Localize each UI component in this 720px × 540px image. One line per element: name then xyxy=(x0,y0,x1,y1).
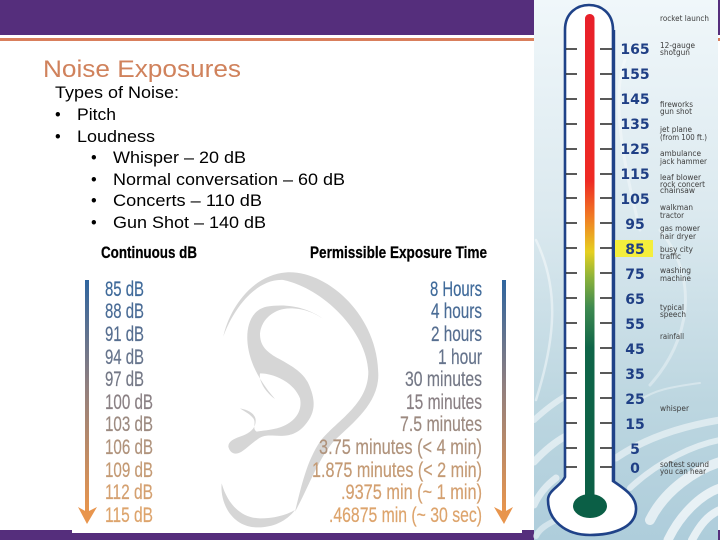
text block: types of noise: • xyxy=(55,128,61,146)
panel: exposure chart xyxy=(72,236,522,533)
sound source labels: gun shot xyxy=(660,107,692,116)
text block: types of noise: Concerts – 110 dB xyxy=(113,192,262,210)
sound source labels: speech xyxy=(660,310,686,319)
sound source labels: fireworks xyxy=(660,100,693,109)
sound source labels: you can hear xyxy=(660,467,707,476)
list: exposure times: 4 hours xyxy=(431,300,482,323)
text block: types of noise xyxy=(55,84,345,232)
sound source labels: walkman xyxy=(660,203,693,212)
scale numbers: 125 xyxy=(620,142,650,158)
sound source labels: (from 100 ft.) xyxy=(660,133,707,142)
sound source labels: traffic xyxy=(660,252,681,261)
sound source labels: leaf blower xyxy=(660,173,702,182)
text block: types of noise: • xyxy=(91,171,97,189)
text block: types of noise: • xyxy=(91,214,97,232)
sound source labels: softest sound xyxy=(660,460,709,469)
text block: types of noise: Normal conversation – 60 dB xyxy=(113,171,345,189)
sound source labels: jack hammer xyxy=(659,157,708,166)
sound source labels: busy city xyxy=(660,245,693,254)
scale numbers: 165 xyxy=(620,42,650,58)
list: exposure times: 2 hours xyxy=(431,323,482,346)
list: decibel levels: 109 dB xyxy=(105,459,153,482)
scale numbers: 35 xyxy=(625,367,645,383)
scale numbers: 155 xyxy=(620,67,650,83)
sound source labels xyxy=(659,14,709,476)
text block: types of noise: Loudness xyxy=(77,128,155,146)
arrow: left xyxy=(78,280,97,524)
sound source labels: rock concert xyxy=(660,180,705,189)
panel: decibel thermometer xyxy=(534,0,720,540)
text block: types of noise: Types of Noise: xyxy=(55,84,179,102)
text block: types of noise: Pitch xyxy=(77,106,116,124)
orange rule xyxy=(0,38,720,41)
sound source labels: chainsaw xyxy=(660,186,695,195)
sound source labels: hair dryer xyxy=(660,232,697,241)
list: decibel levels: 85 dB xyxy=(105,278,144,301)
list: exposure times: 15 minutes xyxy=(406,391,482,414)
swirl background xyxy=(534,60,720,540)
sound source labels: washing xyxy=(660,266,691,275)
sound source labels: whisper xyxy=(660,404,690,413)
footer bar xyxy=(0,530,720,540)
list: decibel levels: 100 dB xyxy=(105,391,153,414)
text block: types of noise: • xyxy=(91,149,97,167)
mercury column xyxy=(573,14,607,518)
sound source labels: jet plane xyxy=(659,125,692,134)
text block: types of noise: • xyxy=(91,192,97,210)
heading: continuous dB: Continuous dB xyxy=(101,243,197,262)
scale numbers: 105 xyxy=(620,192,650,208)
scale numbers: 65 xyxy=(625,292,645,308)
text block: types of noise: • xyxy=(55,106,61,124)
sound source labels: gas mower xyxy=(660,224,701,233)
list: exposure times xyxy=(312,278,482,527)
scale numbers: 15 xyxy=(625,417,645,433)
header bar xyxy=(0,0,720,35)
list: exposure times: 8 Hours xyxy=(430,278,482,301)
scale numbers: 55 xyxy=(625,317,645,333)
scale numbers: 145 xyxy=(620,92,650,108)
scale numbers: 5 xyxy=(630,442,640,458)
list: exposure times: 7.5 minutes xyxy=(400,413,482,436)
text block: types of noise: Whisper – 20 dB xyxy=(113,149,246,167)
list: exposure times: 3.75 minutes (< 4 min) xyxy=(319,436,482,459)
list: decibel levels: 91 dB xyxy=(105,323,144,346)
sound source labels: typical xyxy=(660,303,684,312)
list: decibel levels: 112 dB xyxy=(105,481,153,504)
sound source labels: tractor xyxy=(660,211,685,220)
thermometer outline xyxy=(548,5,636,535)
list: decibel levels: 97 dB xyxy=(105,368,144,391)
scale numbers: 115 xyxy=(620,167,650,183)
list: decibel levels: 103 dB xyxy=(105,413,153,436)
scale numbers xyxy=(620,42,650,477)
scale numbers: 85 xyxy=(625,242,645,258)
heading: permissible exposure time: Permissible Exposure Time xyxy=(310,243,487,262)
right wall emphasis xyxy=(612,30,615,481)
list: exposure times: 1 hour xyxy=(438,346,482,369)
title: Noise Exposures xyxy=(43,56,241,83)
list: decibel levels: 94 dB xyxy=(105,346,144,369)
scale numbers: 45 xyxy=(625,342,645,358)
list: exposure times: 30 minutes xyxy=(405,368,482,391)
sound source labels: 12-gauge xyxy=(660,41,695,50)
list: decibel levels: 115 dB xyxy=(105,504,153,527)
scale numbers: 135 xyxy=(620,117,650,133)
arrow: right xyxy=(494,280,513,524)
scale numbers: 75 xyxy=(625,267,645,283)
tick marks xyxy=(566,49,612,467)
sound source labels: rocket launch xyxy=(660,14,709,23)
list: decibel levels xyxy=(105,278,153,527)
scale numbers: 95 xyxy=(625,217,645,233)
scale numbers: 25 xyxy=(625,392,645,408)
icon: ear xyxy=(221,272,378,527)
sound source labels: shotgun xyxy=(660,48,690,57)
list: exposure times: .9375 min (~ 1 min) xyxy=(341,481,482,504)
sound source labels: ambulance xyxy=(660,149,701,158)
list: decibel levels: 88 dB xyxy=(105,300,144,323)
scale numbers: 0 xyxy=(630,461,640,477)
sound source labels: rainfall xyxy=(660,332,684,341)
highlight: 85 dB xyxy=(615,240,653,257)
list: decibel levels: 106 dB xyxy=(105,436,153,459)
list: exposure times: 1.875 minutes (< 2 min) xyxy=(312,459,482,482)
text block: types of noise: Gun Shot – 140 dB xyxy=(113,214,266,232)
sound source labels: machine xyxy=(660,274,691,283)
list: exposure times: .46875 min (~ 30 sec) xyxy=(329,504,482,527)
